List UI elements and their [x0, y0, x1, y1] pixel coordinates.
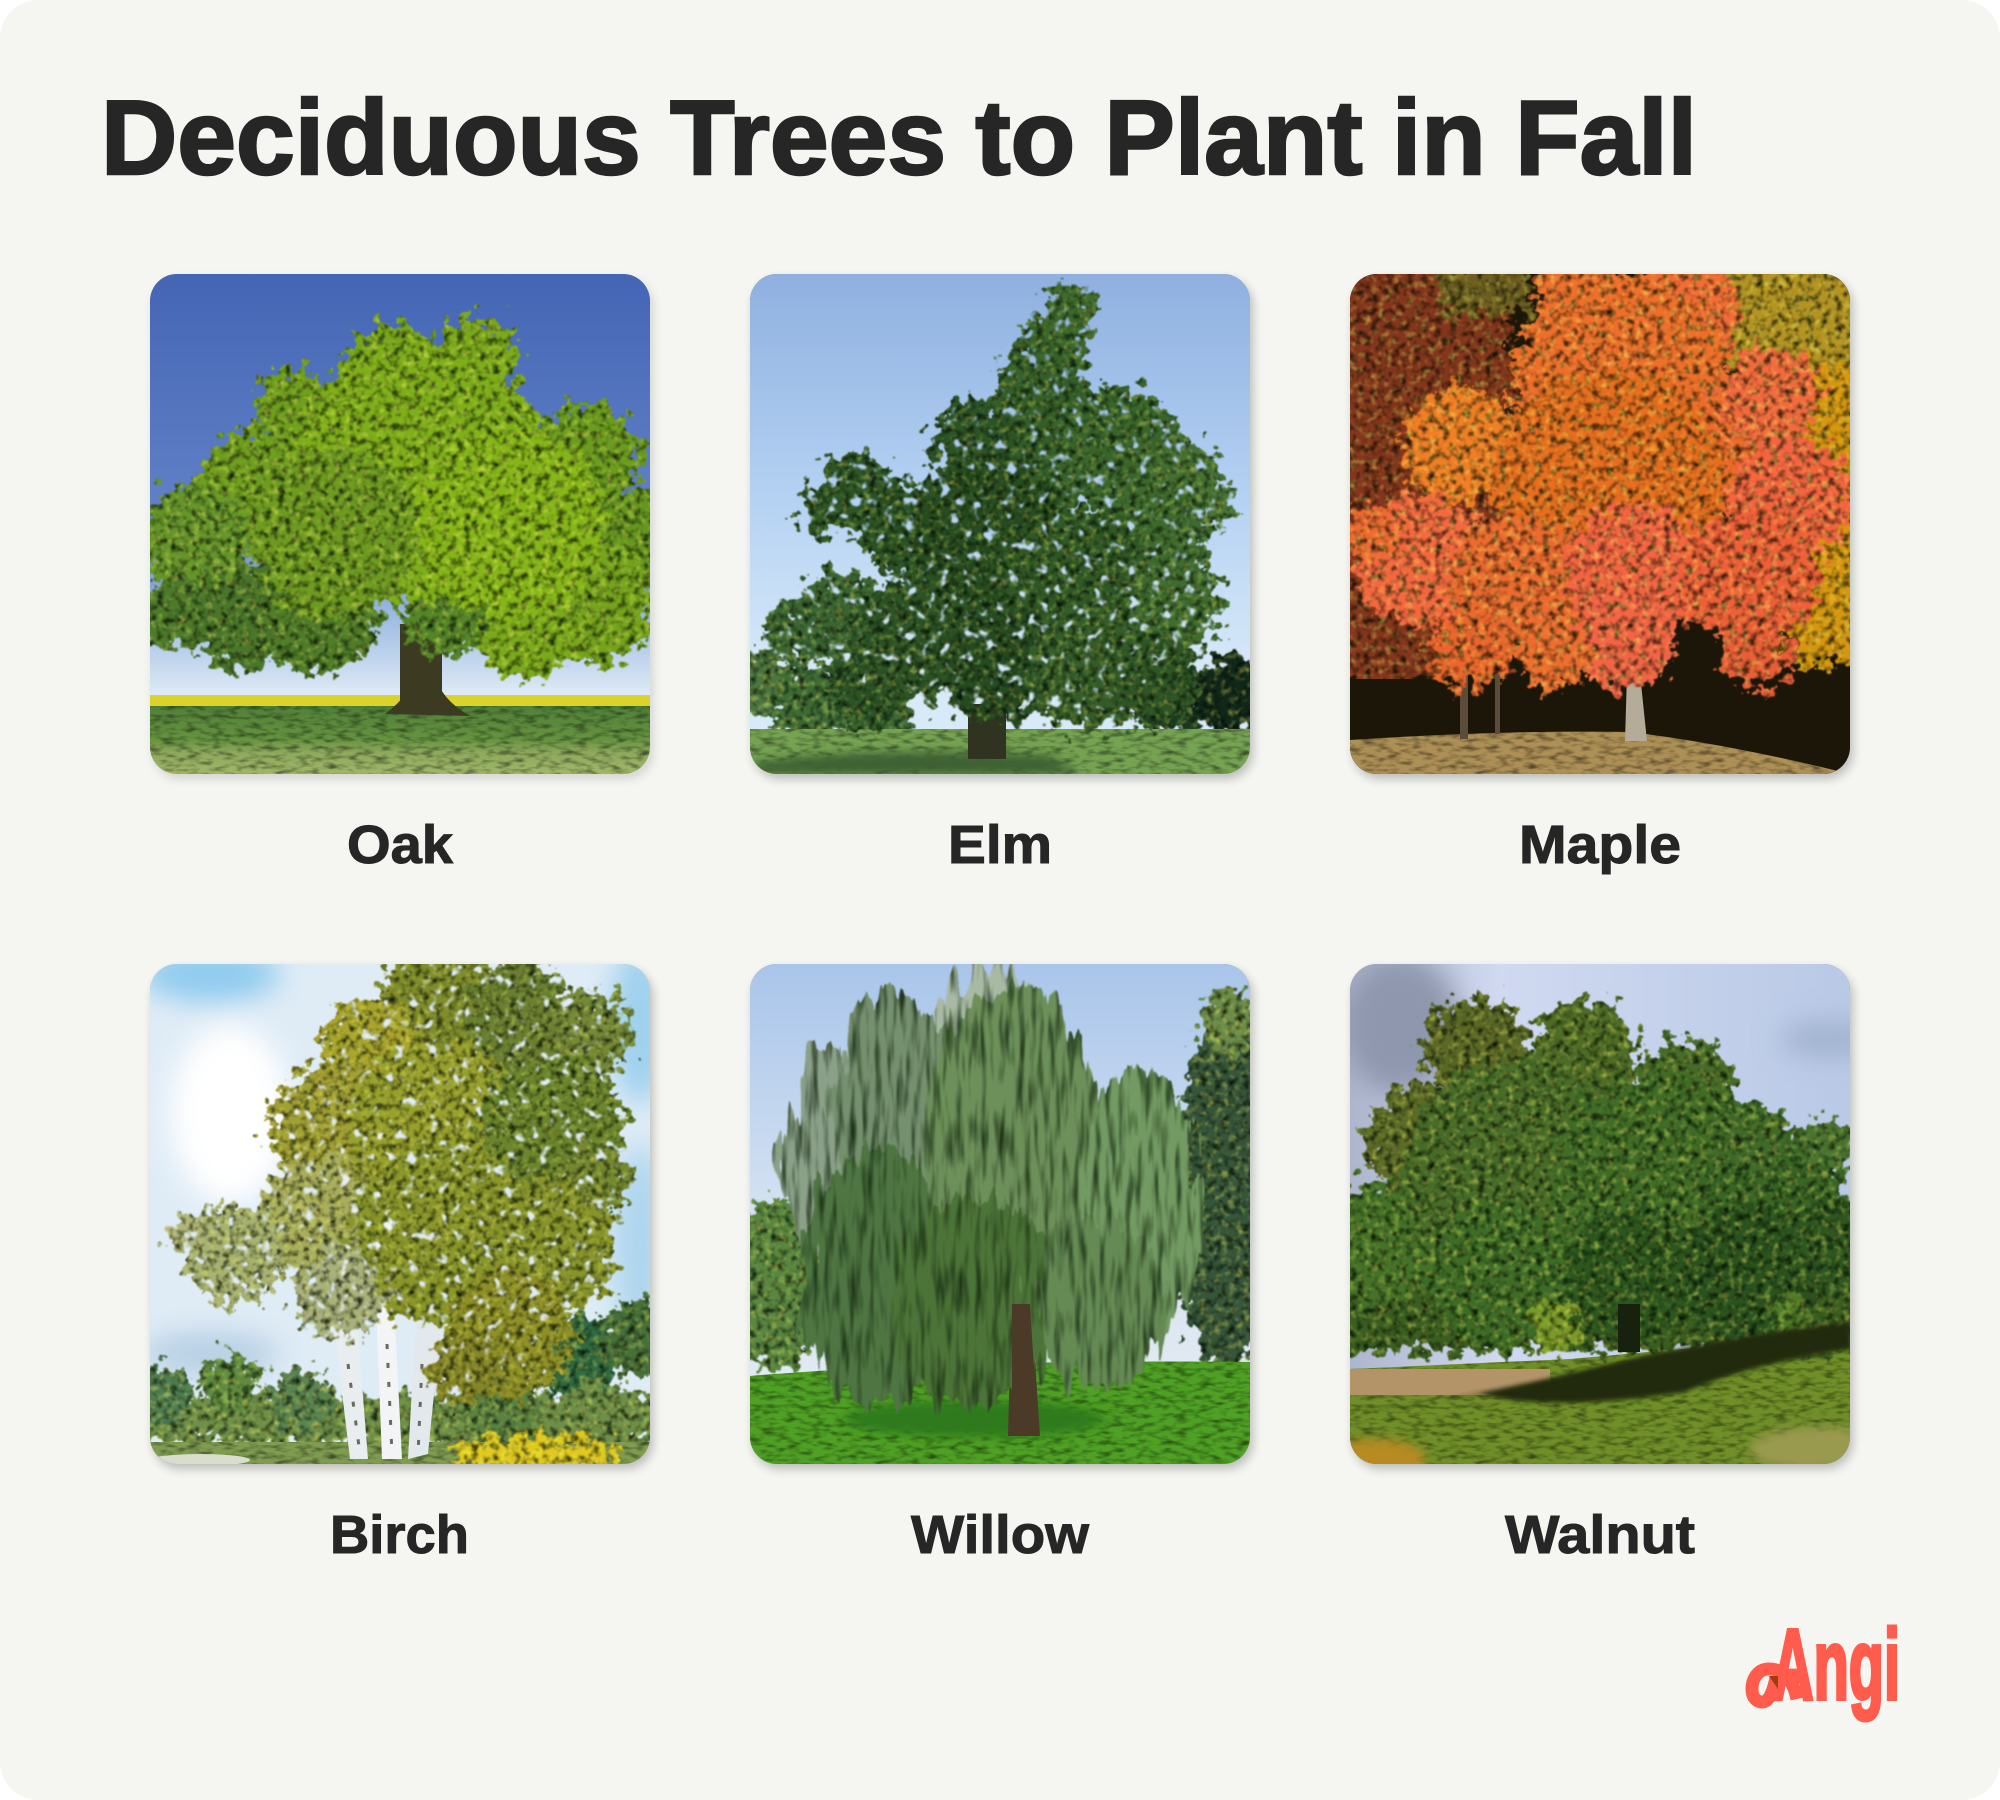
photo: elm tree: [728, 274, 1268, 774]
panel: maple: [1348, 274, 1858, 874]
photo: walnut tree: [1348, 964, 1858, 1474]
photo: maple tree: [1348, 274, 1858, 784]
label: Maple: Maple: [1519, 815, 1681, 875]
panel: elm: [728, 274, 1268, 875]
logo: Angi: [1752, 1609, 1900, 1721]
panel: birch: [148, 964, 658, 1554]
label: Walnut: Walnut: [1505, 1505, 1695, 1565]
logo: Angi: Angi: [1772, 1609, 1900, 1721]
label: Birch: Birch: [330, 1505, 469, 1565]
label: Elm: Elm: [948, 815, 1052, 875]
title: Deciduous Trees to Plant in Fall: [101, 79, 1697, 197]
photo: willow tree: [726, 964, 1284, 1464]
panel: walnut: [1348, 964, 1858, 1554]
photo: oak tree: [136, 274, 680, 774]
label: Willow: Willow: [911, 1505, 1090, 1565]
panel: oak: [136, 274, 680, 875]
label: Oak: Oak: [347, 815, 454, 875]
photo: birch tree: [148, 964, 658, 1474]
panel: willow: [748, 964, 1258, 1554]
